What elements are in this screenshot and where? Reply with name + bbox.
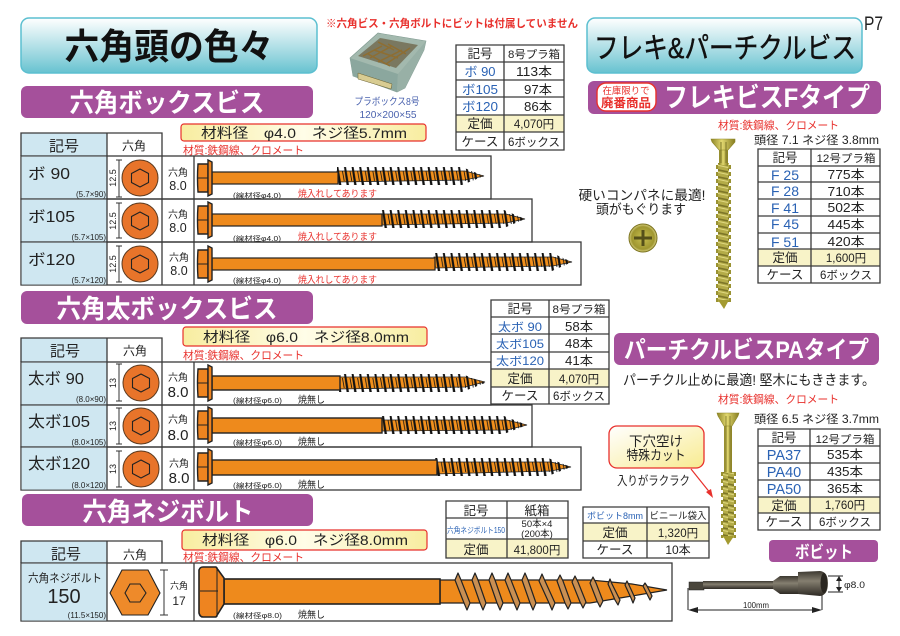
caption: plastic box size: プラボックス8号 (354, 96, 420, 108)
dimension: flexi screw: 頭径 7.1 ネジ径 3.8mm (754, 134, 879, 147)
table: flexi screw packaging: 445本 (828, 218, 865, 232)
spec box: thick box screw: 材料径 φ6.0 ネジ径8.0mm (203, 329, 409, 345)
table header: thick box screw: 六角 (123, 344, 147, 358)
row: 太ボ120: (線材径φ6.0) (233, 481, 282, 490)
title: フレキ&パーチクルビス (587, 18, 862, 73)
table: box screw packaging: ボ105 (462, 83, 498, 97)
row: ボ90 (21, 156, 491, 200)
table: flexi screw packaging (758, 149, 880, 283)
table: particle screw packaging (758, 429, 880, 530)
row: ボ120: 焼入れしてあります (298, 274, 377, 286)
row: 太ボ90: (8.0×90) (76, 395, 106, 404)
row: 太ボ105 (21, 405, 532, 448)
row: hex bolt 150: 六角ネジボルト (28, 572, 102, 585)
heading: フレキビスFタイプ: フレキビスFタイプ (664, 83, 870, 113)
table: particle screw packaging: PA37 (767, 448, 801, 464)
spec box: hex bolt: 材料径 φ6.0 ネジ径8.0mm (202, 532, 408, 548)
row: 太ボ90: 8.0 (168, 384, 188, 401)
row: hex bolt 150: 17 (172, 594, 186, 608)
table: thick box screw packaging: ケース (502, 389, 538, 403)
table: particle screw packaging: 535本 (827, 448, 864, 462)
table: thick box screw packaging: 8号プラ箱 (552, 302, 606, 316)
table: box screw packaging: ケース (462, 135, 498, 149)
table: hex bolt packaging: (200本) (521, 528, 553, 540)
table: hex bolt packaging: 50本×4 (522, 518, 552, 530)
photo: plastic box (350, 33, 426, 92)
row: 太ボ90: 焼無し (298, 394, 325, 406)
title: 六角頭の色々: 六角頭の色々 (64, 26, 274, 67)
illustration: socket bit (689, 571, 828, 596)
text: hard concrete panels (578, 188, 706, 217)
table: flexi screw packaging: 420本 (828, 235, 865, 249)
row: 太ボ90: (線材径φ6.0) (233, 396, 282, 405)
heading: 六角ボックスビス (21, 86, 313, 118)
row: ボ105: 12.5 (108, 212, 118, 230)
table: thick box screw packaging: 太ボ105 (496, 338, 544, 351)
row: 太ボ105: (線材径φ6.0) (233, 438, 282, 447)
table header: box screw: 六角 (122, 139, 146, 153)
table: bit packaging: 10本 (665, 543, 691, 557)
table: thick box screw packaging: 記号 (507, 302, 533, 316)
table: flexi screw packaging: F 28 (771, 183, 799, 199)
icon: flexi screw head (629, 224, 657, 252)
spec box: box screw: 材料径 φ4.0 ネジ径5.7mm (201, 125, 407, 141)
row: 太ボ90: 13 (108, 378, 118, 388)
row: ボ90: 六角 (168, 166, 188, 179)
material: thick box screw: 材質:鉄鋼線、クロメート (183, 348, 304, 362)
row: 太ボ105: (8.0×105) (72, 438, 106, 447)
table: particle screw packaging: 365本 (827, 482, 864, 496)
table: box screw packaging: 4,070円 (514, 119, 554, 131)
material: box screw: 材質:鉄鋼線、クロメート (183, 143, 304, 157)
row: ボ120: (線材径φ4.0) (233, 276, 281, 285)
row: 太ボ120: (8.0×120) (72, 481, 106, 490)
table: particle screw packaging: 1,760円 (825, 500, 865, 512)
table: thick box screw packaging: 6ボックス (553, 390, 605, 403)
table: box screw packaging: 定価 (467, 117, 493, 131)
row: 太ボ105: 太ボ105 (28, 413, 90, 431)
row: hex bolt 150: (11.5×150) (68, 611, 106, 620)
table: bit packaging: ビニール袋入 (650, 510, 707, 522)
row: ボ120: 8.0 (170, 264, 188, 278)
row: ボ105: (線材径φ4.0) (233, 234, 281, 243)
dimension: bit diameter: φ8.0 (844, 580, 865, 591)
table: particle screw packaging: PA50 (767, 482, 801, 498)
row: ボ120: 12.5 (108, 255, 118, 273)
row: 太ボ105: 8.0 (168, 427, 188, 444)
heading: ボビット (769, 540, 878, 562)
dimension: bit length: 100mm (743, 600, 769, 610)
caption: plastic box size (354, 96, 420, 121)
text: hard concrete panels: 硬いコンパネに最適! (578, 188, 706, 203)
table: thick box screw packaging: 48本 (565, 337, 594, 351)
spec box: thick box screw (183, 327, 427, 346)
table: flexi screw packaging: F 41 (771, 200, 799, 216)
table: box screw packaging: 8号プラ箱 (508, 47, 560, 61)
callout: special cut (609, 426, 704, 468)
table header: hex bolt: 六角 (123, 548, 147, 562)
table header: box screw (21, 133, 162, 156)
material: flexi screw: 材質:鉄鋼線、クロメート (718, 118, 839, 132)
illustration: particle screw (717, 413, 739, 545)
heading: 六角ネジボルト: 六角ネジボルト (82, 497, 254, 527)
table: flexi screw packaging: 710本 (828, 185, 865, 199)
heading: 六角ネジボルト (22, 494, 313, 527)
table: thick box screw packaging (491, 300, 609, 404)
table: box screw packaging: ボ120 (462, 100, 498, 114)
table: particle screw packaging: 記号 (771, 431, 797, 445)
row: ボ105 (21, 199, 532, 243)
callout: special cut: 下穴空け (629, 434, 683, 449)
row: 太ボ90 (21, 362, 491, 406)
row: hex bolt 150: 焼無し (298, 609, 325, 621)
table: particle screw packaging: PA40 (767, 465, 801, 481)
row: ボ90: (5.7×90) (76, 190, 106, 199)
table: bit packaging: ケース (597, 543, 633, 557)
table: particle screw packaging: 435本 (827, 465, 864, 479)
row: ボ105: 8.0 (169, 221, 187, 235)
row: 太ボ120: 8.0 (169, 470, 189, 487)
table header: box screw: 記号 (49, 138, 79, 155)
badge: discontinued (597, 83, 656, 111)
row: 太ボ105: 焼無し (298, 436, 325, 448)
table: thick box screw packaging: 4,070円 (559, 374, 599, 386)
table: hex bolt packaging: 41,800円 (514, 545, 560, 557)
heading: パーチクルビスPAタイプ: パーチクルビスPAタイプ (624, 337, 869, 364)
badge: discontinued: 在庫限りで (602, 85, 650, 97)
row: 太ボ105: 13 (108, 421, 118, 431)
text: easy entry: 入りがラクラク (617, 473, 690, 488)
table: flexi screw packaging: F 45 (771, 216, 799, 232)
table header: hex bolt (21, 541, 162, 563)
row: 太ボ90: 六角 (168, 371, 188, 384)
row: 太ボ105: 六角 (168, 413, 188, 426)
row: ボ105: 焼入れしてあります (298, 231, 377, 243)
table: box screw packaging: ボ 90 (464, 65, 496, 79)
table: box screw packaging (456, 45, 564, 150)
table: particle screw packaging: 定価 (771, 499, 797, 513)
table: hex bolt packaging: 紙箱 (524, 503, 550, 518)
material: hex bolt: 材質:鉄鋼線、クロメート (183, 550, 304, 564)
material: particle screw: 材質:鉄鋼線、クロメート (718, 392, 839, 406)
table: thick box screw packaging: 41本 (565, 354, 594, 368)
row: ボ120 (21, 242, 581, 286)
row: ボ120: (5.7×120) (72, 276, 106, 285)
row: hex bolt 150 (21, 563, 672, 621)
table: flexi screw packaging: 定価 (772, 251, 798, 265)
table: flexi screw packaging: 502本 (828, 201, 865, 215)
row: 太ボ120: 焼無し (298, 479, 325, 491)
table: box screw packaging: 記号 (467, 47, 493, 61)
title: 六角頭の色々 (21, 18, 317, 73)
table: particle screw packaging: 12号プラ箱 (816, 432, 874, 446)
heading: ボビット: ボビット (795, 542, 853, 562)
table: hex bolt packaging (446, 501, 568, 558)
row: ボ105: (5.7×105) (72, 233, 106, 242)
arrow: callout to screw tip (691, 469, 713, 498)
table: thick box screw packaging: 太ボ 90 (498, 321, 542, 334)
dimension: particle screw: 頭径 6.5 ネジ径 3.7mm (754, 413, 879, 426)
row: ボ90: (線材径φ4.0) (233, 191, 281, 200)
spec box: hex bolt (182, 530, 427, 550)
table: box screw packaging: 86本 (524, 100, 553, 114)
row: ボ90: 8.0 (169, 179, 187, 193)
heading: 六角ボックスビス: 六角ボックスビス (70, 88, 264, 118)
row: hex bolt 150: (線材径φ8.0) (233, 611, 282, 620)
table: flexi screw packaging: 6ボックス (820, 269, 872, 282)
note: bit not included: ※六角ビス・六角ボルトにビットは付属していません (326, 16, 578, 30)
text: hard concrete panels: 頭がもぐります (596, 202, 686, 217)
title: フレキ&パーチクルビス: フレキ&パーチクルビス (594, 33, 856, 65)
table: bit packaging (583, 507, 709, 558)
row: 太ボ120 (21, 447, 581, 491)
table: bit packaging: 1,320円 (658, 528, 698, 540)
illustration: flexi screw (711, 139, 735, 309)
table: flexi screw packaging: F 25 (771, 167, 799, 183)
row: 太ボ90: 太ボ 90 (28, 370, 84, 388)
table: flexi screw packaging: 1,600円 (826, 253, 866, 265)
table header: thick box screw: 記号 (50, 343, 80, 360)
table: flexi screw packaging: ケース (767, 268, 803, 282)
table: bit packaging: 定価 (602, 526, 628, 540)
table: thick box screw packaging: 太ボ120 (496, 355, 544, 368)
table: box screw packaging: 6ボックス (508, 136, 560, 149)
row: ボ120: 六角 (169, 251, 189, 264)
row: ボ105: ボ105 (28, 208, 75, 226)
row: ボ105: 六角 (168, 208, 188, 221)
table: flexi screw packaging: 12号プラ箱 (816, 151, 876, 165)
row: 太ボ120: 13 (108, 464, 118, 474)
row: hex bolt 150: 150 (47, 586, 81, 608)
table: thick box screw packaging: 定価 (507, 372, 533, 386)
callout: special cut: 特殊カット (626, 448, 686, 463)
row: 太ボ120: 六角 (169, 457, 189, 470)
table: hex bolt packaging: 記号 (463, 504, 489, 518)
row: 太ボ120: 太ボ120 (28, 455, 90, 473)
caption: plastic box size: 120×200×55 (360, 109, 417, 121)
row: ボ90: ボ 90 (28, 165, 70, 183)
table: particle screw packaging: 6ボックス (819, 516, 871, 529)
table: hex bolt packaging: 六角ネジボルト150 (447, 525, 505, 535)
badge: discontinued: 廃番商品 (601, 95, 651, 110)
table: particle screw packaging: ケース (766, 515, 802, 529)
table: flexi screw packaging: F 51 (771, 234, 799, 250)
text: particle board usage: パーチクル止めに最適! 堅木にもききます。 (623, 372, 875, 388)
table header: hex bolt: 記号 (51, 546, 81, 563)
row: hex bolt 150: 六角 (170, 580, 188, 591)
row: ボ90: 焼入れしてあります (298, 188, 377, 200)
table header: thick box screw (21, 338, 162, 362)
table: hex bolt packaging: 定価 (463, 543, 489, 557)
table: box screw packaging: 97本 (524, 83, 553, 97)
heading: 六角太ボックスビス: 六角太ボックスビス (56, 294, 278, 324)
table: flexi screw packaging: 記号 (772, 151, 798, 165)
row: ボ90: 12.5 (108, 169, 118, 187)
row: ボ120: ボ120 (28, 251, 75, 269)
dimension: bit diameter (828, 576, 865, 592)
table: thick box screw packaging: 58本 (565, 320, 594, 334)
heading: フレキビスFタイプ (588, 81, 881, 114)
table: box screw packaging: 113本 (516, 65, 553, 79)
table: flexi screw packaging: 775本 (828, 168, 865, 182)
dimension: bit length (688, 588, 822, 613)
table: bit packaging: ボビット8mm (587, 511, 643, 521)
page number: P7 (864, 14, 883, 35)
